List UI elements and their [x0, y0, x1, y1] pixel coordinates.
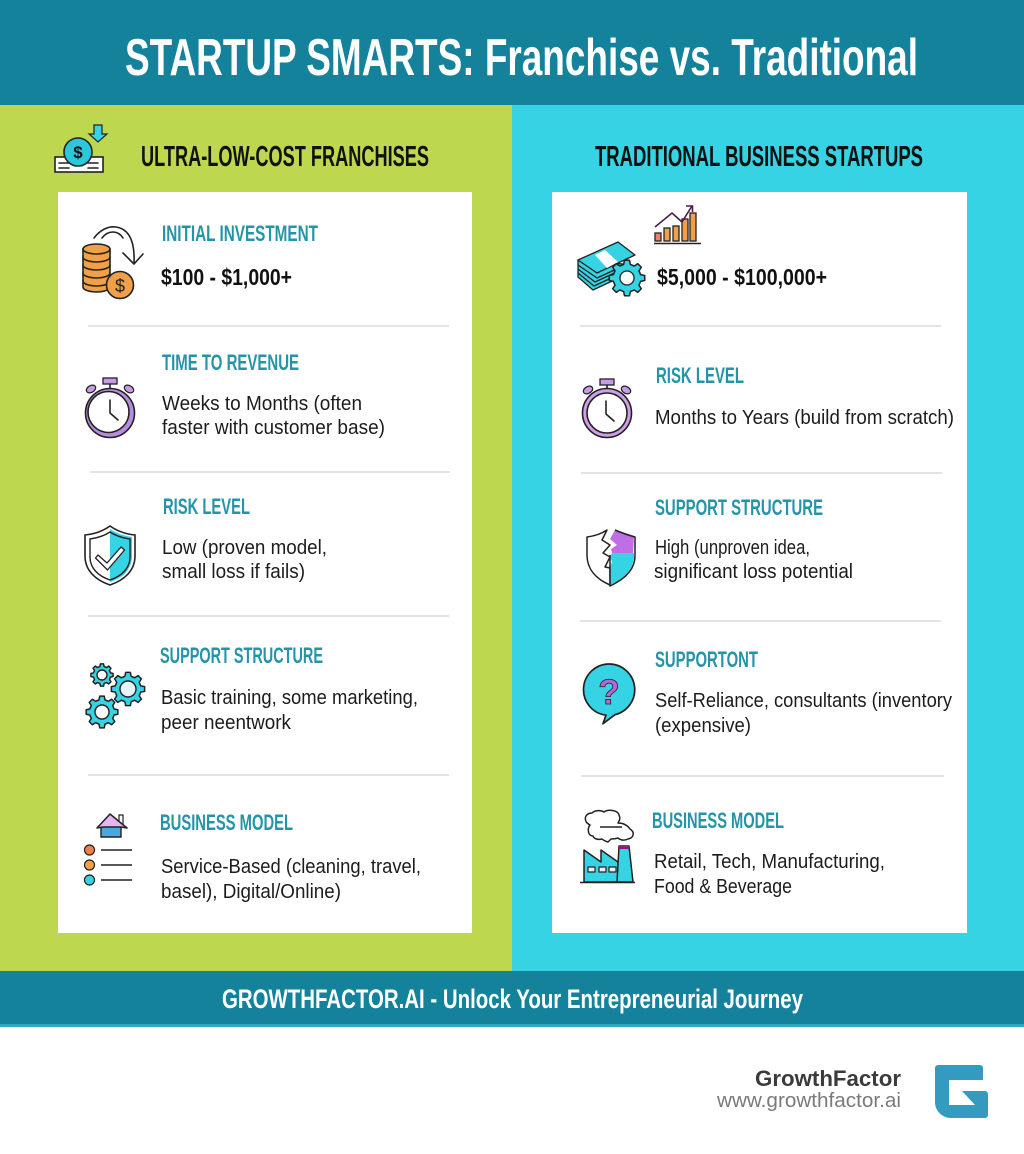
description: months to years: Months to Years (build from scratch)	[655, 407, 954, 429]
description: support structure: Basic training, some marketing,	[161, 687, 418, 709]
icon: stopwatch	[582, 379, 632, 438]
card: franchise details	[58, 192, 472, 933]
heading: ultra-low-cost franchises: ULTRA-LOW-COST FRANCHISES	[141, 141, 429, 173]
icon: factory and cloud	[580, 810, 635, 882]
row: time to revenue	[85, 350, 385, 439]
description: high risk: significant loss potential	[654, 561, 853, 583]
description: self-reliance: Self-Reliance, consultants (inventory	[655, 690, 952, 712]
row: business model	[84, 810, 421, 903]
description: support structure: peer neentwork	[161, 712, 292, 734]
label: business model: BUSINESS MODEL	[652, 808, 784, 833]
description: business model: basel), Digital/Online)	[161, 881, 341, 903]
label: business model: BUSINESS MODEL	[160, 810, 293, 835]
icon: cash and gear	[578, 242, 645, 296]
description: time to revenue: faster with customer base)	[162, 417, 385, 439]
description: risk level: Low (proven model,	[162, 537, 327, 559]
title banner	[0, 0, 1024, 105]
logo: GrowthFactor G	[935, 1065, 988, 1118]
row: initial investment	[83, 221, 318, 298]
row: support structure	[86, 643, 418, 734]
label: time to revenue: TIME TO REVENUE	[162, 350, 299, 375]
brand name and url: GrowthFactor	[755, 1066, 901, 1091]
panel: ultra-low-cost franchises	[0, 105, 512, 971]
footer banner: GROWTHFACTOR.AI - Unlock Your Entrepreneurial Journey	[222, 984, 803, 1014]
row: time to revenue	[582, 363, 954, 438]
brand name and url: www.growthfactor.ai	[716, 1090, 901, 1112]
label: initial investment: INITIAL INVESTMENT	[162, 221, 318, 246]
icon: gears	[86, 664, 145, 728]
brand name and url	[716, 1066, 901, 1112]
label: risk level: RISK LEVEL	[656, 363, 744, 388]
description: high risk: High (unproven idea,	[655, 537, 810, 559]
value: traditional investment: $5,000 - $100,000+	[657, 264, 827, 290]
row: supportont	[583, 647, 952, 737]
card: traditional details	[552, 192, 967, 933]
icon: house and list	[84, 814, 132, 885]
icon: growth chart	[654, 206, 701, 244]
icon: shield	[85, 526, 135, 585]
row: risk level	[85, 494, 327, 585]
description: industries: Food & Beverage	[654, 876, 792, 898]
footer banner	[0, 971, 1024, 1027]
icon: broken shield	[587, 530, 635, 586]
label: support structure: SUPPORT STRUCTURE	[160, 643, 323, 668]
row: business model	[580, 808, 885, 898]
icon: money deposit	[55, 125, 107, 172]
label: support structure: SUPPORT STRUCTURE	[655, 495, 823, 520]
description: business model: Service-Based (cleaning, travel,	[161, 856, 421, 878]
description: industries: Retail, Tech, Manufacturing,	[654, 851, 885, 873]
icon: coins	[83, 227, 143, 298]
description: self-reliance: (expensive)	[655, 715, 751, 737]
description: time to revenue: Weeks to Months (often	[162, 393, 362, 415]
icon: money deposit: $	[73, 143, 83, 162]
value: franchise investment: $100 - $1,000+	[161, 264, 292, 290]
row: initial investment	[578, 206, 827, 296]
label: supportont: SUPPORTONT	[655, 647, 758, 672]
label: risk level: RISK LEVEL	[163, 494, 250, 519]
icon: coins: $	[115, 276, 125, 296]
panel: traditional business startups	[512, 105, 1024, 971]
icon: question bubble	[583, 664, 635, 724]
description: risk level: small loss if fails)	[162, 561, 305, 583]
icon: question bubble: ?	[598, 673, 620, 712]
icon: stopwatch	[85, 378, 135, 438]
row: support structure	[587, 495, 853, 586]
